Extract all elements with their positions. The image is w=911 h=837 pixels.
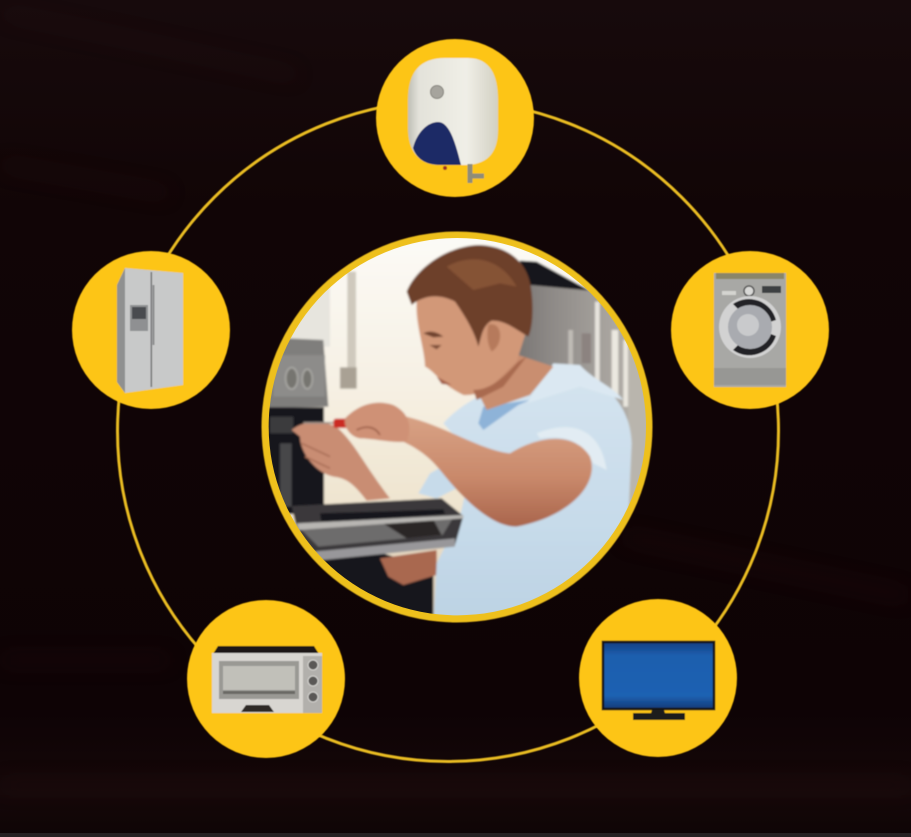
mouth	[437, 377, 452, 385]
icon circle: refrigerator (left)	[72, 251, 230, 409]
oven cavity	[260, 407, 324, 514]
wall	[289, 238, 588, 614]
heater pipe	[470, 164, 484, 183]
washer body	[714, 273, 786, 387]
fridge dispenser	[130, 305, 148, 331]
shirt collar	[478, 400, 530, 430]
photo border	[262, 232, 652, 622]
washer door	[719, 296, 781, 358]
photo: technician repairing oven	[260, 230, 655, 625]
right fist	[345, 403, 409, 442]
eye and brow	[423, 332, 443, 337]
cabinet handle	[347, 272, 356, 388]
water heater tank	[408, 58, 498, 165]
panel: central photo of technician	[260, 230, 655, 625]
lower forearm	[380, 550, 437, 585]
connecting ring	[118, 100, 778, 762]
toaster knobs	[308, 660, 318, 670]
icon circle: water heater (top)	[376, 39, 534, 197]
shirt sleeve under arm	[418, 468, 456, 500]
arm upper	[400, 417, 592, 527]
toaster window	[219, 661, 299, 699]
toaster body	[212, 653, 322, 713]
head: face	[416, 287, 527, 395]
oven control panel	[260, 338, 328, 408]
fridge body	[117, 268, 183, 393]
neck	[477, 353, 553, 410]
steel fridge	[518, 260, 630, 422]
icon circle: toaster oven (bottom left)	[187, 600, 345, 758]
tv screen	[603, 642, 714, 709]
left hand and forearm	[292, 422, 390, 501]
icon circle: washing machine (right)	[671, 251, 829, 409]
heater blue panel	[413, 122, 461, 165]
shirt	[433, 365, 632, 625]
tv stand	[633, 710, 685, 720]
toaster top	[213, 646, 319, 654]
lower dark area	[322, 552, 435, 614]
hair	[407, 245, 533, 347]
ear	[487, 324, 500, 352]
toaster handle	[241, 705, 274, 712]
icon circle: television (bottom right)	[579, 599, 737, 757]
heater dial	[430, 86, 444, 98]
washer controls	[744, 286, 754, 296]
oven door	[291, 497, 464, 551]
screwdriver	[303, 422, 337, 424]
